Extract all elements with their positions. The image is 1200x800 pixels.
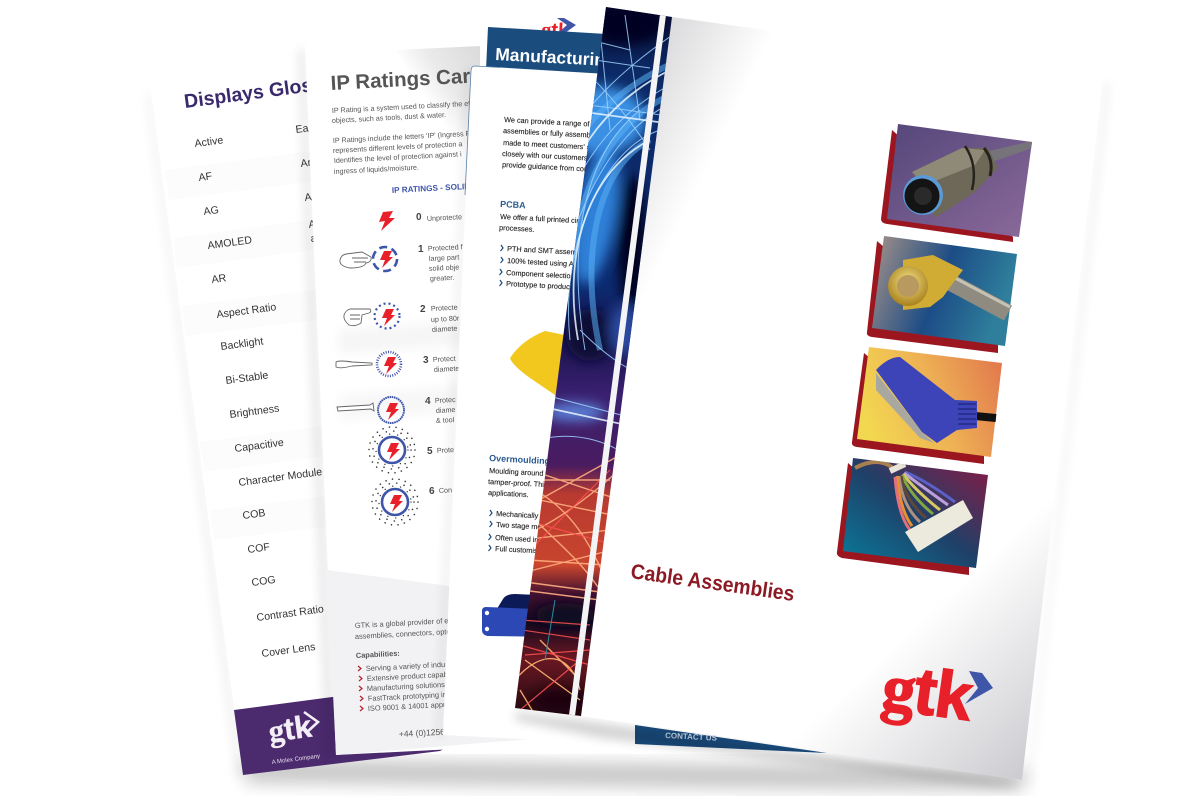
blue moulded part bbox=[482, 594, 560, 637]
purple footer bbox=[234, 660, 610, 775]
ratings list: 1 bbox=[418, 244, 424, 255]
red backing 1 bbox=[881, 130, 1013, 242]
heading: IP Ratings Card bbox=[330, 64, 483, 95]
ratings list: Unprotecte bbox=[427, 212, 462, 223]
intro text: IP Ratings include the letters 'IP' (Ingress P bbox=[333, 129, 471, 145]
glossary term list: a bbox=[310, 232, 317, 245]
ratings list: diamete bbox=[432, 324, 458, 334]
icon: pointing hand and dotted circle 2 bbox=[344, 304, 400, 328]
white band bbox=[569, 14, 666, 716]
overmoulding section: Overmoulding bbox=[489, 453, 550, 466]
photo: circular connector bbox=[887, 124, 1032, 237]
glossary term list: COF bbox=[247, 541, 271, 556]
ratings list: 6 bbox=[429, 486, 435, 497]
heading: Manufacturing bbox=[495, 44, 616, 70]
PCBA section: 100% tested using A bbox=[507, 256, 574, 268]
company text: Capabilities: bbox=[356, 649, 400, 660]
icon: bolt 0 bbox=[379, 211, 395, 231]
ratings list: Protecte bbox=[431, 303, 458, 313]
blue header bbox=[486, 27, 640, 78]
ratings list: large part bbox=[429, 252, 459, 263]
glossary term list: Cover Lens bbox=[261, 641, 316, 660]
intro text: provide guidance from con bbox=[502, 160, 588, 173]
company text bbox=[355, 616, 452, 739]
glossary term list: Character Module bbox=[238, 466, 323, 489]
heading: Displays Glossary bbox=[183, 69, 353, 113]
contact bar bbox=[635, 725, 827, 753]
overmoulding section: Full customis bbox=[495, 544, 538, 555]
glossary term list: AF bbox=[198, 170, 213, 184]
logo: gtk white bbox=[266, 709, 321, 766]
sub heading: IP RATINGS - SOLID bbox=[392, 182, 470, 195]
intro text: Identifies the level of protection against i bbox=[334, 149, 462, 165]
title: Cable Assemblies bbox=[629, 560, 796, 606]
ratings list: solid obje bbox=[429, 262, 459, 273]
intro text: objects, such as tools, dust & water. bbox=[332, 110, 446, 125]
PCBA section: PTH and SMT assemb bbox=[507, 244, 581, 257]
ratings list: diamete bbox=[434, 364, 460, 374]
photo: wire harness bbox=[843, 458, 988, 568]
overmoulding section: Often used in bbox=[495, 533, 539, 544]
overmoulding section: Two stage mo bbox=[496, 520, 542, 531]
glossary term list: COG bbox=[251, 574, 276, 589]
ratings list: Protected f bbox=[428, 242, 463, 253]
overmoulding section: tamper-proof. Thi bbox=[488, 477, 544, 489]
panel: displays glossary sheet bbox=[150, 36, 620, 775]
PCBA section: Prototype to produc bbox=[506, 279, 570, 291]
intro text bbox=[502, 115, 596, 173]
glossary term list: COB bbox=[242, 507, 266, 522]
icon: dust circle 6 bbox=[372, 479, 418, 525]
photo: blue ribbon connector bbox=[857, 347, 1002, 457]
glossary term list: Ea bbox=[295, 122, 309, 136]
abstract light strip artwork bbox=[515, 7, 672, 716]
overmoulding section: Mechanically bbox=[496, 509, 539, 520]
icon: hand and dashed circle 1 bbox=[340, 247, 397, 271]
drop shadows bbox=[146, 80, 1109, 790]
logo: gtk white: A Molex Company bbox=[271, 754, 321, 766]
ratings list bbox=[416, 212, 463, 497]
company text: +44 (0)1256 4 bbox=[399, 726, 452, 739]
logo top: gtk bbox=[541, 19, 571, 42]
photo: gold SMA connector bbox=[872, 236, 1017, 346]
ratings list: 0 bbox=[416, 212, 422, 223]
ratings list: 4 bbox=[425, 396, 431, 407]
yellow part bbox=[510, 331, 590, 397]
company text: GTK is a global provider of el bbox=[355, 616, 451, 630]
cover shadow bbox=[515, 712, 1022, 786]
ratings list: & tool bbox=[436, 415, 455, 425]
intro text: closely with our customers bbox=[502, 149, 588, 162]
ratings list: 2 bbox=[420, 304, 426, 315]
glossary term list: An bbox=[300, 156, 314, 170]
PCBA section: PCBA bbox=[500, 199, 526, 210]
intro text: We can provide a range of s bbox=[504, 115, 596, 129]
logo: gtk white: gtk bbox=[266, 709, 314, 749]
glossary term list: Brightness bbox=[229, 403, 280, 421]
glossary term list: AR bbox=[211, 272, 227, 286]
sheet 3 shadow bbox=[436, 68, 472, 738]
glossary term list: AMOLED bbox=[207, 234, 253, 252]
ratings list: 5 bbox=[427, 446, 433, 457]
overmoulding section bbox=[488, 453, 550, 555]
red backing 4 bbox=[837, 463, 969, 575]
glossary term list bbox=[194, 122, 325, 660]
glossary term list: Capacitive bbox=[234, 437, 285, 455]
PCBA section: We offer a full printed cir bbox=[500, 212, 580, 225]
ratings list: Protec bbox=[435, 395, 456, 405]
company text: FastTrack prototyping ir bbox=[368, 690, 446, 703]
panel: IP ratings card sheet bbox=[305, 22, 830, 755]
icon: tool and circle 4 bbox=[337, 397, 404, 423]
PCBA section bbox=[499, 199, 581, 291]
company text: Serving a variety of indu bbox=[366, 660, 445, 673]
cover page bbox=[581, 17, 1103, 780]
company text: Extensive product capab bbox=[367, 670, 448, 683]
grey footer band bbox=[327, 570, 640, 755]
icon: screwdriver and circle 3 bbox=[336, 352, 401, 376]
ratings list: diame bbox=[436, 405, 456, 415]
intro text: IP Rating is a system used to classify the eff bbox=[332, 99, 472, 115]
glossary term list: Contrast Ratio bbox=[256, 603, 325, 624]
glossary term list: A bbox=[308, 218, 317, 231]
glossary term list: Backlight bbox=[220, 335, 264, 353]
intro text: represents different levels of protection a bbox=[333, 139, 463, 155]
glossary term list: AG bbox=[203, 204, 220, 218]
sheet 2 shadow bbox=[298, 48, 336, 756]
white panel bbox=[444, 66, 640, 741]
ratings list: Con bbox=[439, 485, 452, 495]
icon: dust circle 5 bbox=[369, 427, 415, 473]
company text: Manufacturing solutions bbox=[367, 680, 445, 693]
red backing 2 bbox=[867, 241, 998, 353]
red backing 3 bbox=[852, 353, 984, 464]
company text: assemblies, connectors, opto bbox=[355, 627, 451, 641]
intro text: ingress of liquids/moisture. bbox=[334, 163, 419, 176]
ratings list: 3 bbox=[423, 355, 429, 366]
glossary term list: Bi-Stable bbox=[225, 369, 269, 387]
intro text bbox=[332, 99, 472, 176]
ratings list: greater. bbox=[430, 273, 454, 283]
panel edge line bbox=[465, 66, 500, 195]
intro text: assemblies or fully assemb bbox=[503, 126, 591, 140]
glossary term list: Active bbox=[194, 134, 224, 150]
overmoulding section: Moulding around bbox=[489, 466, 544, 478]
ratings list: Protect bbox=[433, 354, 456, 364]
logo: gtk: gtk bbox=[878, 649, 977, 735]
overmoulding section: applications. bbox=[488, 488, 529, 499]
PCBA section: processes. bbox=[499, 223, 535, 234]
company text: ISO 9001 & 14001 appr bbox=[368, 700, 446, 713]
panel: cover sheet bbox=[515, 7, 1048, 780]
ratings list: Prote bbox=[437, 445, 454, 455]
glossary term list: A bbox=[304, 191, 313, 204]
intro text: made to meet customers' s bbox=[503, 138, 591, 152]
glossary term list: Aspect Ratio bbox=[216, 301, 277, 321]
panel: manufacturing sheet bbox=[443, 10, 827, 753]
ratings list: up to 80r bbox=[431, 313, 460, 324]
contact bar: CONTACT US bbox=[665, 731, 718, 743]
PCBA section: Component selectio bbox=[506, 268, 571, 280]
